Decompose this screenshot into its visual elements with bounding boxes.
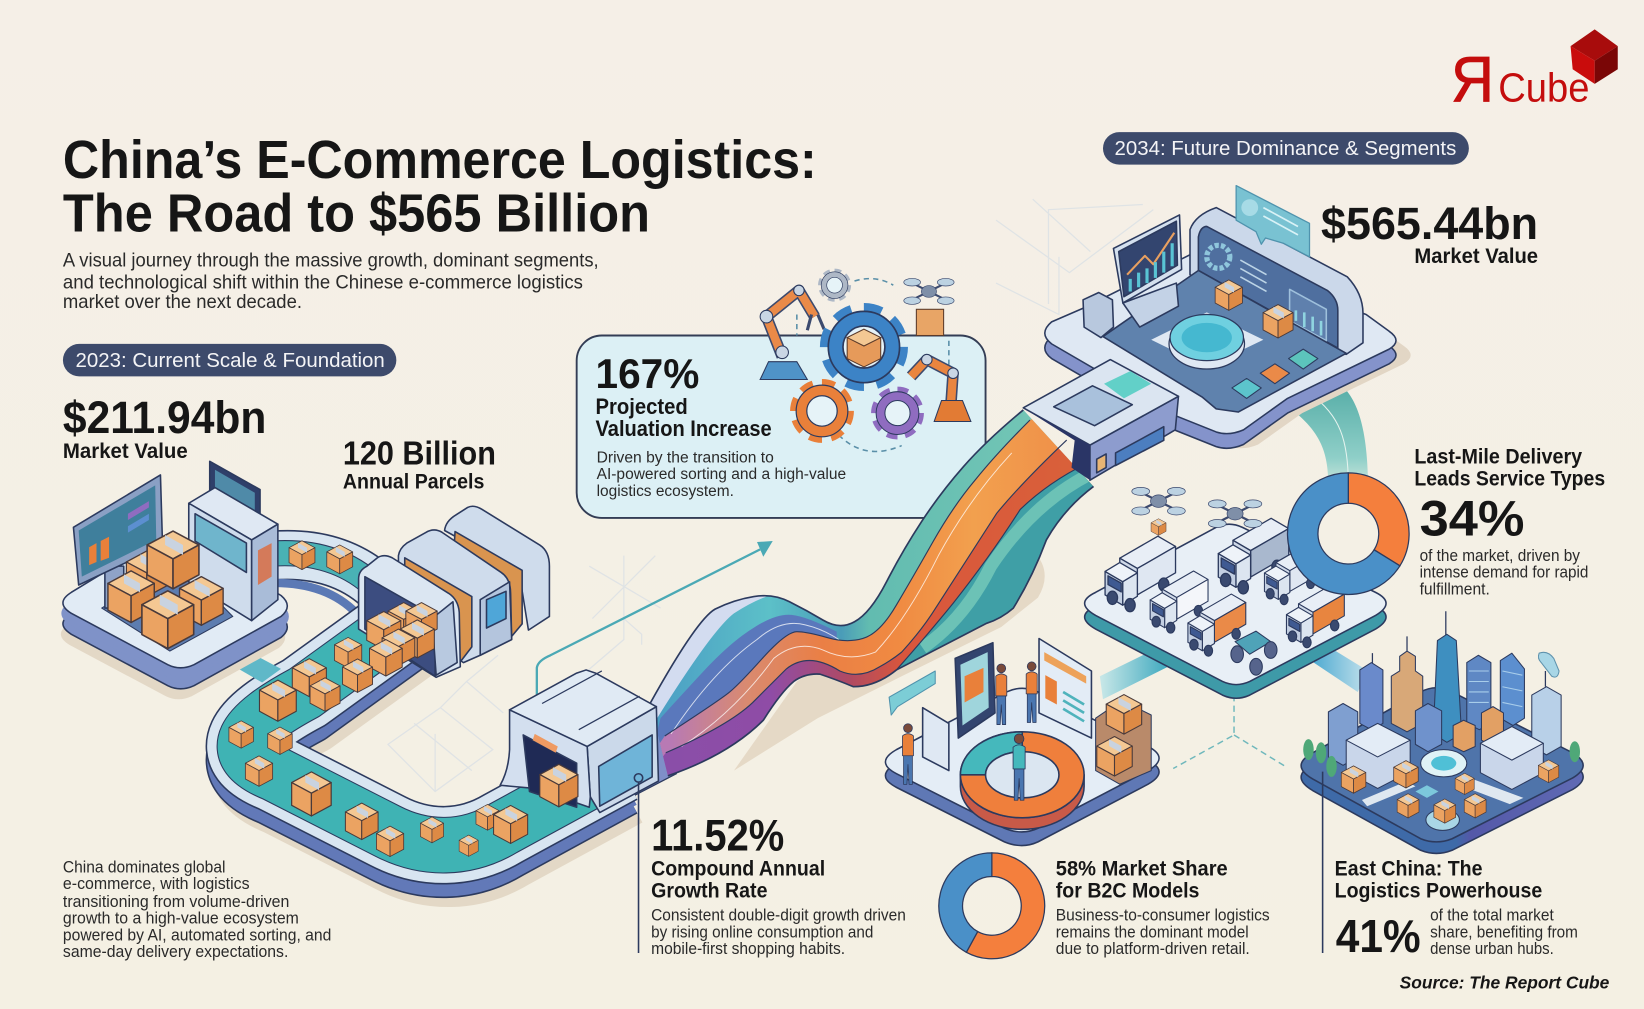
section pill: 2034: 2034: Future Dominance & Segments [1115, 137, 1456, 160]
stat: CAGR: Consistent double-digit growth driven [651, 907, 906, 925]
stat: East China [1335, 856, 1578, 962]
arrow: growth trajectory [537, 541, 773, 695]
label: projected valuation increase [596, 394, 772, 441]
conveyor belt [245, 594, 624, 868]
conveyor upper loop [273, 553, 383, 613]
stat: East China: dense urban hubs. [1430, 940, 1554, 958]
text: China dominates global e-commerce: same-day delivery expectations. [63, 943, 288, 961]
text: driven by AI transition: logistics ecosystem. [597, 483, 734, 500]
icon: parcel shelf [1096, 695, 1151, 784]
stat: CAGR: mobile-first shopping habits. [651, 940, 845, 958]
teal feed from 2034 hub to last-mile donut [1290, 376, 1368, 493]
roads [1362, 777, 1523, 806]
icon: shoppers [902, 662, 1037, 800]
icon: left monitor [73, 475, 163, 608]
callout line: East China [1322, 772, 1324, 953]
stat: 2023 market value [63, 392, 266, 463]
title: China’s E-Commerce Logistics: [63, 131, 817, 190]
title: The Road to $565 Billion [63, 185, 650, 244]
icon: delivery drones [1132, 487, 1262, 535]
text: China dominates global e-commerce: growth to a high-value ecosystem [63, 910, 299, 928]
stat: 2034 market value: Market Value [1414, 244, 1538, 268]
source credit: Source: The Report Cube [1400, 973, 1609, 993]
text: China dominates global e-commerce: powered by AI, automated sorting, and [63, 926, 331, 944]
dashed hub connector lines [1173, 695, 1285, 768]
subtitle: and technological shift within the Chinese e-commerce logistics [63, 271, 583, 293]
icon: kiosk [189, 461, 278, 621]
text: driven by AI transition: Driven by the transition to [597, 449, 774, 466]
growth ribbon [650, 409, 1094, 777]
section pill: 2023 [63, 344, 396, 376]
stat: last-mile delivery: 34% [1420, 490, 1524, 547]
stat: B2C market share: for B2C Models [1056, 878, 1199, 902]
platform: B2C models [885, 638, 1159, 846]
stat: 2023 market value: Market Value [63, 439, 188, 463]
platform: last-mile delivery fleet [1085, 487, 1386, 698]
section pill: 2034 [1103, 132, 1469, 165]
rear tunnel [445, 506, 549, 636]
stat: annual parcels: Annual Parcels [343, 470, 484, 494]
icon: automation gears, robot arms and drone [760, 271, 971, 451]
title [63, 131, 817, 244]
panel: 167% projected valuation increase [577, 271, 986, 518]
stat: CAGR: 11.52% [651, 811, 784, 860]
boxes on conveyor [229, 541, 528, 857]
stat: last-mile delivery: Last-Mile Delivery [1414, 444, 1582, 468]
icon: cloud [1538, 652, 1559, 677]
hub parcels and tiles [1215, 280, 1318, 398]
stat: annual parcels: 120 Billion [343, 435, 496, 472]
connector beams below delivery platform [1100, 646, 1368, 699]
stat: 2034 market value: $565.44bn [1321, 198, 1538, 249]
trees [1303, 739, 1580, 777]
donut chart: B2C 58% [939, 853, 1045, 959]
icon: phone and web screens [889, 638, 1091, 771]
stat: B2C market share: Business-to-consumer logistics [1056, 907, 1270, 925]
icon: analytics monitor [1083, 215, 1182, 338]
icon: delivery trucks [1105, 518, 1344, 656]
stat: East China: Logistics Powerhouse [1335, 878, 1542, 902]
stat: last-mile delivery: of the market, driven by [1420, 547, 1581, 565]
stat: B2C market share [1056, 856, 1270, 958]
icon: hub back wall with screen [1190, 208, 1363, 354]
logo: RCube: Cube [1498, 65, 1589, 111]
icon: isometric 58% ring [960, 732, 1084, 829]
stat: B2C market share: due to platform-driven retail. [1056, 940, 1250, 958]
stat: East China: 41% [1336, 910, 1421, 962]
donut chart: last-mile 34% [1287, 473, 1409, 594]
platform: East China city [1301, 611, 1583, 853]
subtitle: A visual journey through the massive growth, dominant segments, [63, 249, 599, 271]
logo: RCube [1451, 29, 1618, 116]
text: China dominates global e-commerce: transitioning from volume-driven [63, 893, 289, 911]
stat: last-mile delivery [1414, 444, 1605, 598]
text: China dominates global e-commerce [63, 858, 331, 961]
ribbon shadow [734, 550, 1045, 771]
subtitle: market over the next decade. [63, 291, 302, 313]
front tunnel [359, 556, 460, 677]
stat: 2023 market value: $211.94bn [63, 392, 266, 443]
stat: East China: East China: The [1335, 856, 1483, 880]
label: projected valuation increase: Valuation Increase [596, 416, 772, 441]
icon: chat data bubble [1236, 186, 1310, 257]
label: projected valuation increase: Projected [596, 394, 688, 419]
text: driven by AI transition: AI-powered sorting and a high-value [597, 466, 846, 483]
wall between exit unit and ribbon [600, 713, 676, 814]
middle tunnel [398, 530, 512, 663]
stat: last-mile delivery: Leads Service Types [1414, 466, 1605, 490]
platform: 2034 hub [1045, 186, 1411, 448]
stat: 167%: 167% [596, 350, 699, 397]
text: China dominates global e-commerce: e-commerce, with logistics [63, 875, 250, 893]
stat: B2C market share: 58% Market Share [1056, 856, 1228, 880]
stat: CAGR [651, 811, 906, 958]
connector block [1023, 360, 1178, 480]
stat: last-mile delivery: fulfillment. [1420, 580, 1490, 598]
stat: B2C market share: remains the dominant model [1056, 923, 1249, 941]
platform: current warehouse [61, 461, 287, 699]
stat: CAGR: Compound Annual [651, 856, 825, 880]
stat: East China: share, benefiting from [1430, 923, 1578, 941]
text: driven by AI transition [597, 449, 846, 500]
stat: CAGR: by rising online consumption and [651, 923, 873, 941]
hologram hub [1415, 750, 1467, 830]
conveyor exit unit [500, 670, 658, 813]
city parcels [1341, 760, 1559, 823]
stat: East China: of the total market [1430, 907, 1554, 925]
wireframe grid decoration [388, 199, 1153, 792]
city skyscrapers [1328, 611, 1561, 789]
logo: RCube: Я [1451, 43, 1494, 116]
text: China dominates global e-commerce: China dominates global [63, 858, 225, 876]
icon: delivery robot [1231, 631, 1277, 675]
stat: CAGR: Growth Rate [651, 878, 768, 902]
subtitle [63, 249, 599, 313]
stat: annual parcels [343, 435, 496, 494]
boxes on warehouse platform [108, 531, 223, 649]
icon: central lens [1151, 312, 1263, 369]
stat: last-mile delivery: intense demand for rapid [1420, 564, 1588, 582]
callout line: CAGR [634, 774, 643, 953]
section pill: 2023: 2023: Current Scale & Foundation [76, 349, 385, 372]
sorting tunnels [359, 506, 549, 677]
connector beam: platform to conveyor [215, 645, 281, 683]
